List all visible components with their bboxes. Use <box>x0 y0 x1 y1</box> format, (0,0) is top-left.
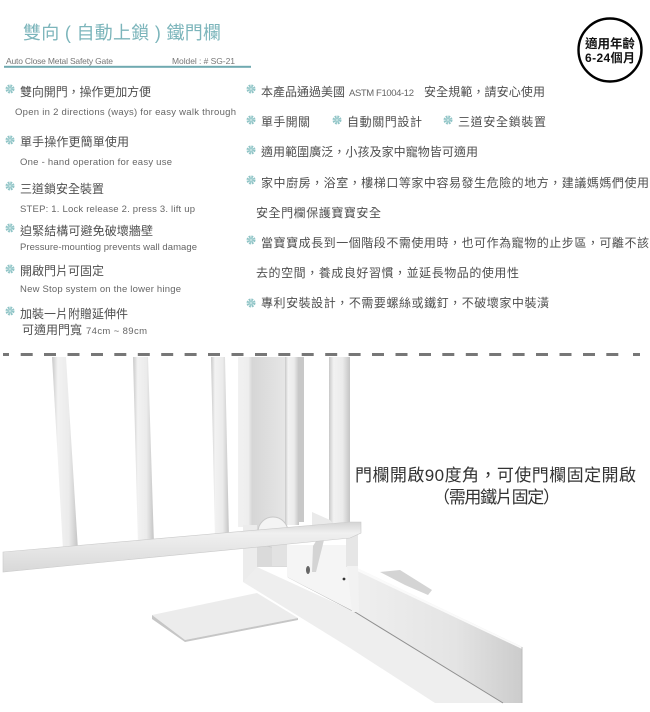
wall post <box>238 357 285 527</box>
note: kitchen and stairs: 安全門欄保護寶寶安全 <box>256 205 381 220</box>
feature: extension piece: 可適用門寬 <box>22 322 82 337</box>
feature: pressure mounting: Pressure-mountiog prevents wall damage <box>20 242 197 253</box>
feature: one-hand operation: 單手操作更簡單使用 <box>20 134 129 149</box>
feature: three-step lock: STEP: 1. Lock release 2. press 3. lift up <box>20 204 195 215</box>
hinge mechanism <box>258 512 359 612</box>
feature: pressure mounting <box>7 223 197 253</box>
note: pet area use: 當寶寶成長到一個階段不需使用時，也可作為寵物的止步區，可離不該 <box>261 235 649 250</box>
feature: two-way opening: 雙向開門，操作更加方便 <box>20 84 151 99</box>
bottom rail <box>3 522 361 572</box>
panel: left feature list <box>7 84 236 337</box>
title underline <box>4 66 251 68</box>
dashed divider <box>3 353 640 356</box>
feature: door stop <box>7 263 181 295</box>
feature: extension piece: 加裝一片附贈延伸件 <box>20 306 128 321</box>
title: 雙向 ( 自動上鎖 ) 鐵門欄 <box>23 23 221 43</box>
floor plate <box>152 593 298 642</box>
feature: pressure mounting: 迫緊結構可避免破壞牆壁 <box>20 223 153 238</box>
caption: （需用鐵片固定） <box>433 488 560 507</box>
product photo: gate hinge illustration <box>3 357 522 703</box>
note: ASTM certification <box>248 84 545 99</box>
feature: three-step lock <box>7 181 195 215</box>
feature: extension piece: 74cm ~ 89cm <box>86 326 147 337</box>
caption: 門欄開啟90度角，可使門欄固定開啟 <box>355 465 636 485</box>
note: three product features <box>248 114 546 129</box>
note: three product features: 單手開關 <box>261 115 310 129</box>
small plate behind beam <box>380 570 432 595</box>
vertical bars <box>52 357 350 550</box>
note: ASTM certification: ASTM F1004-12 <box>349 88 414 99</box>
age badge: 6-24個月 <box>585 51 635 65</box>
note: kitchen and stairs: 家中廚房，浴室，樓梯口等家中容易發生危險的地方，建議媽媽們使用 <box>261 175 649 190</box>
note: ASTM certification: 本產品通過美國 <box>261 84 345 99</box>
note: three product features: 自動關門設計 <box>347 114 422 129</box>
feature: extension piece <box>7 306 147 337</box>
feature: two-way opening <box>7 84 236 118</box>
note: kitchen and stairs <box>248 175 649 220</box>
note: three product features: 三道安全鎖裝置 <box>458 114 546 129</box>
age badge: 適用年齡 <box>585 36 635 51</box>
note: pet area use <box>248 235 649 280</box>
lower frame and beam <box>243 525 522 703</box>
feature: three-step lock: 三道鎖安全裝置 <box>20 181 104 196</box>
feature: two-way opening: Open in 2 directions (ways) for easy walk through <box>15 107 236 118</box>
feature: one-hand operation: One - hand operation for easy use <box>20 157 172 168</box>
note: ASTM certification: 安全規範，請安心使用 <box>424 84 545 99</box>
feature: door stop: New Stop system on the lower hinge <box>20 284 181 295</box>
subtitle row: Auto Close Metal Safety Gate <box>6 56 113 66</box>
caption <box>355 465 636 507</box>
subtitle row: Moldel : # SG-21 <box>172 56 235 66</box>
note: wide applicability: 適用範圍廣泛，小孩及家中寵物皆可適用 <box>261 144 478 159</box>
panel: right safety notes <box>248 84 649 310</box>
age badge <box>578 18 642 82</box>
feature: door stop: 開啟門片可固定 <box>20 263 104 278</box>
note: patented installation: 專利安裝設計，不需要螺絲或鐵釘，不破壞家中裝潢 <box>261 295 549 310</box>
note: pet area use: 去的空間，養成良好習慣，並延長物品的使用性 <box>256 265 519 280</box>
feature: one-hand operation <box>7 134 172 168</box>
subtitle row <box>6 56 235 66</box>
